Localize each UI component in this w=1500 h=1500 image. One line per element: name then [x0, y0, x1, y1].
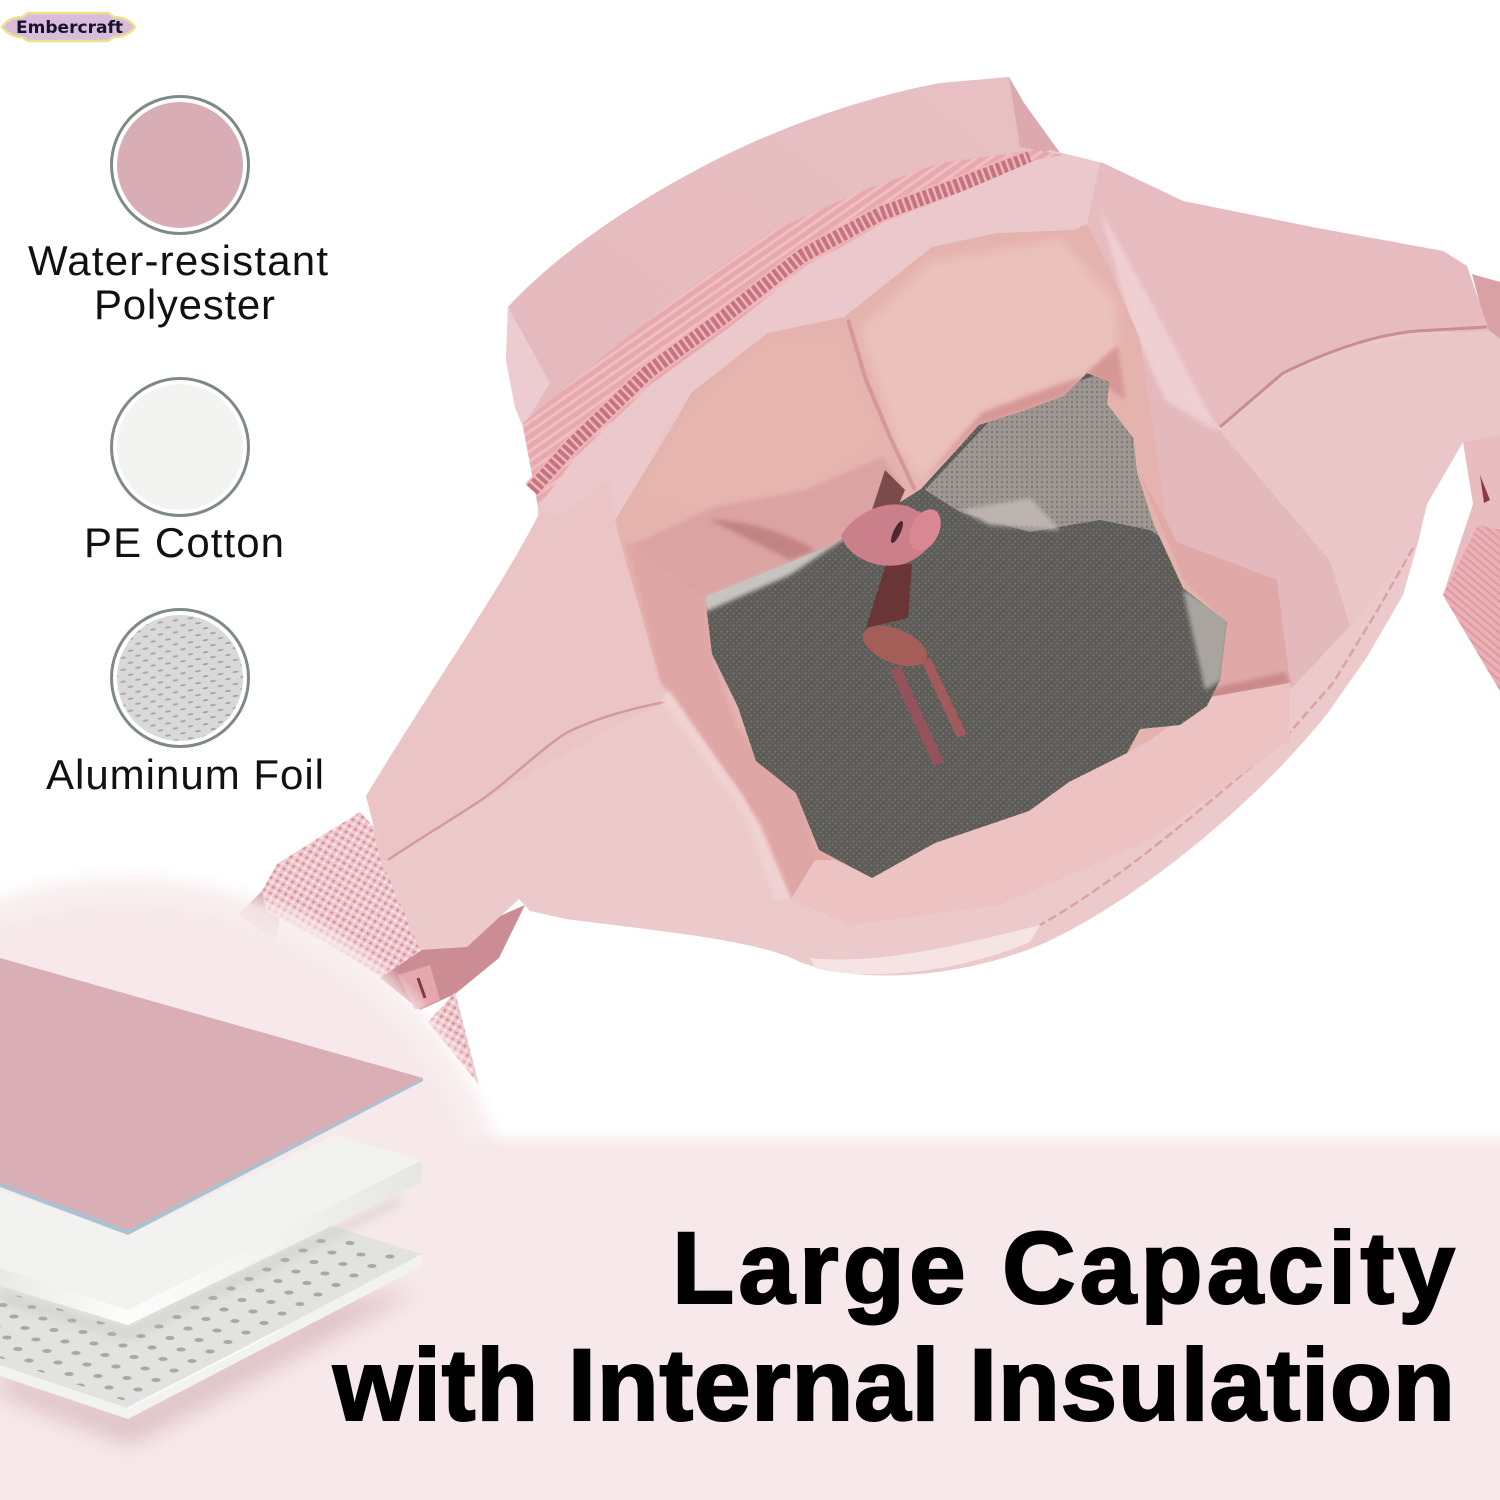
lighter upper foil fold [925, 370, 1165, 540]
PE cotton label: PE Cotton [84, 519, 284, 566]
exploded insulation layers diagram [0, 958, 423, 1445]
pale pink fade circle behind layers [0, 865, 530, 1500]
polyester label: Polyester [94, 281, 275, 328]
upper puffy lining panels [625, 240, 1125, 625]
soft shadow under layers [0, 1290, 420, 1445]
lower front highlight stripe [810, 925, 1040, 974]
product photo: open pink crossbody bag [238, 77, 1500, 1085]
right flap seam [1220, 327, 1487, 427]
material swatch: PE cotton [84, 378, 284, 566]
right fold panel [1087, 224, 1350, 690]
right lower panel [1220, 331, 1500, 626]
left sheer fold line [661, 690, 791, 900]
right inner shadow [1205, 672, 1290, 700]
headline line two: with Internal Insulation [332, 1328, 1455, 1442]
material swatch: aluminum foil [46, 610, 324, 798]
logo badge: Embercraft [2, 13, 135, 41]
aluminum foil swatch circle [112, 610, 248, 746]
main bag body [366, 150, 1500, 975]
PE cotton swatch circle [112, 378, 248, 516]
bottom pale pink band [0, 1128, 1500, 1500]
bag interior [615, 224, 1290, 899]
headline line one: Large Capacity [672, 1211, 1455, 1325]
right sheer edge [1100, 210, 1218, 432]
polyester swatch circle [112, 96, 248, 234]
right inner lining fold [1137, 470, 1290, 695]
left flap seam [388, 701, 669, 860]
headline [332, 1211, 1455, 1442]
zipper teeth [532, 158, 1030, 490]
right shoulder strap [1443, 274, 1500, 691]
left shoulder strap [238, 812, 525, 1085]
left foil highlight [700, 535, 850, 612]
pouch side panel [506, 307, 550, 427]
middle layer: white PE cotton [0, 1135, 422, 1325]
material swatch: water-resistant polyester [28, 96, 328, 328]
sheer lining band [538, 160, 1100, 520]
polyester label: Water-resistant [28, 237, 328, 284]
right foil highlight [1183, 590, 1230, 690]
pouch right end [1009, 77, 1063, 157]
zipper tape [523, 150, 1063, 507]
shadow on foil from cotton layer [0, 1195, 400, 1340]
logo badge: Embercraft: Embercraft [16, 18, 123, 38]
lower right outer seam [1040, 548, 1413, 925]
insulated foil lining interior [700, 370, 1230, 878]
right upper panel [1050, 163, 1490, 427]
drawstring toggle and cord [841, 470, 962, 764]
bottom layer: perforated aluminum foil [0, 1225, 422, 1419]
top layer: pink polyester [0, 958, 423, 1235]
front inner lip [791, 683, 1290, 925]
left inner lip [625, 539, 850, 899]
zipper [523, 150, 1063, 507]
back pouch panel [506, 77, 1063, 507]
left flap upper panel [366, 480, 669, 862]
aluminum foil label: Aluminum Foil [46, 751, 324, 798]
